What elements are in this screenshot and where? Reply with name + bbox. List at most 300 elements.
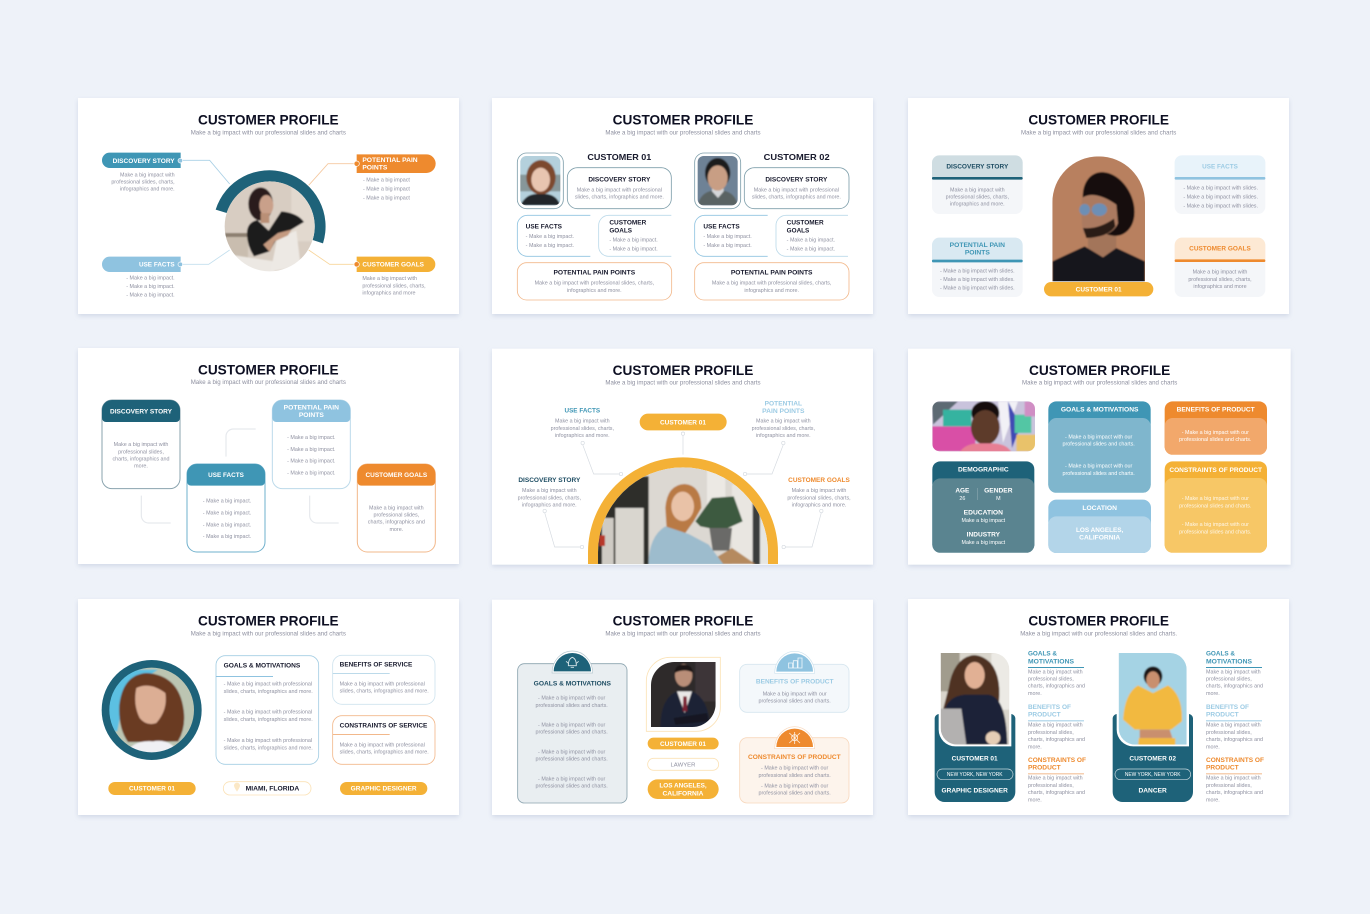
card: use facts: - Make a big impact. [203, 522, 251, 528]
text: customer 02 details: MOTIVATIONS [1206, 658, 1252, 665]
text: customer 01 details: BENEFITS OF [1028, 704, 1071, 711]
text: customer 01 details [1028, 651, 1086, 803]
text: customer 01 details: Make a big impact with [1028, 723, 1083, 729]
panel: slide 8 dome cards [492, 600, 873, 815]
card: use facts: - Make a big impact with slides. [1183, 194, 1258, 200]
pill: customer 01 [648, 738, 719, 749]
text: customer 01 details: professional slides, [1028, 783, 1074, 789]
text: potential pain points [752, 400, 815, 439]
photo: woman in black top [224, 181, 315, 272]
card: constraints of product: - Make a big impact with our [761, 766, 828, 772]
card: use facts: - Make a big impact with slides. [1183, 186, 1258, 192]
card: pain points 01 [517, 263, 672, 300]
text: discovery story: infographics and more. [120, 187, 175, 193]
card: goals and motivations: professional slides and charts. [536, 703, 608, 709]
card: customer 02: DANCER [1138, 787, 1167, 794]
text: customer 02 details: PRODUCT [1206, 765, 1239, 772]
text: customer 02 details: CONSTRAINTS OF [1206, 757, 1264, 764]
card: potential pain points: POINTS [965, 250, 990, 257]
card: potential pain points [272, 400, 350, 489]
card: discovery story 01: slides, charts, infographics and more. [575, 195, 664, 201]
pill: location [223, 782, 311, 795]
text: customer goals: CUSTOMER GOALS [788, 477, 850, 484]
text: customer 01 details: more. [1028, 744, 1042, 750]
text: potential pain points: - Make a big impact [363, 196, 410, 202]
card: demographic: INDUSTRY [967, 531, 1001, 538]
card: potential pain points: - Make a big impact. [287, 471, 336, 477]
card: discovery story 01: Make a big impact with professional [577, 187, 662, 193]
pill: use facts: USE FACTS [139, 262, 175, 269]
text: customer goals: professional slides, charts, [362, 283, 426, 289]
card: benefits of product: professional slides and charts. [1179, 437, 1251, 443]
text: potential pain points: professional slides, charts, [752, 426, 815, 432]
card: discovery story: DISCOVERY STORY [946, 164, 1009, 171]
card: use facts 01: USE FACTS [526, 223, 562, 230]
card: benefits of product: BENEFITS OF PRODUCT [756, 679, 834, 686]
text: customer goals [787, 477, 851, 508]
card: benefits of product [740, 664, 849, 712]
card: constraints of product: professional slides and charts. [1179, 503, 1251, 509]
portrait ring [102, 660, 202, 760]
text: customer 02 details: BENEFITS OF [1206, 704, 1249, 711]
card: benefits of service: Make a big impact with professional [340, 681, 425, 687]
text: discovery story: Make a big impact with [120, 172, 175, 178]
card: constraints of product: CONSTRAINTS OF PRODUCT [1169, 467, 1262, 474]
title: CUSTOMER PROFILE [1028, 612, 1169, 628]
subtitle: Make a big impact with our professional slides and charts. [1020, 630, 1177, 637]
card: constraints of service [333, 716, 435, 764]
card: demographic: Make a big impact [962, 540, 1006, 546]
card: constraints of service: CONSTRAINTS OF SERVICE [340, 722, 427, 729]
subtitle: Make a big impact with our professional slides and charts [191, 630, 346, 637]
text: customer 01 details: PRODUCT [1028, 712, 1061, 719]
card: discovery story 02: DISCOVERY STORY [765, 177, 828, 184]
text: discovery story: professional slides, charts, [111, 180, 175, 186]
icon: blue dome [775, 651, 815, 673]
pill: job title [340, 782, 427, 795]
card: goals and motivations: - Make a big impact with our [538, 696, 605, 702]
card: use facts 01 [517, 215, 590, 256]
card: demographic: AGE [955, 487, 969, 494]
text: customer 01 details: CONSTRAINTS OF [1028, 757, 1086, 764]
card: goals and motivations: professional slides and charts. [1063, 441, 1135, 447]
text: customer 02 details: Make a big impact with [1206, 776, 1261, 782]
pill: customer 01: CUSTOMER 01 [129, 785, 175, 792]
card: discovery story [102, 400, 180, 489]
card: customer goals: CUSTOMER GOALS [365, 472, 427, 479]
card: goals and motivations: professional slides and charts. [536, 757, 608, 763]
card: demographic: GENDER [984, 487, 1013, 494]
photo frame: customer 02 [695, 153, 741, 209]
photo: man in suit [646, 657, 720, 731]
pill: lawyer [648, 758, 719, 770]
card: goals and motivations: - Make a big impact with professional [224, 710, 312, 716]
pill: use facts [102, 257, 183, 272]
card: discovery story: professional slides, [118, 449, 164, 455]
pill: discovery story: DISCOVERY STORY [113, 158, 175, 165]
photo: laughing woman [940, 651, 1010, 746]
card: customer goals 01: CUSTOMER [609, 220, 647, 227]
card: goals and motivations: - Make a big impact with professional [224, 682, 312, 688]
card: goals and motivations: slides, charts, infographics and more. [224, 717, 313, 723]
card: discovery story: Make a big impact with [950, 187, 1005, 193]
card: potential pain points: POTENTIAL PAIN [284, 404, 339, 411]
card: potential pain points: - Make a big impact with slides. [940, 286, 1015, 292]
text: potential pain points: PAIN POINTS [762, 408, 804, 415]
card: customer goals 01: - Make a big impact. [609, 238, 658, 244]
card: customer 02: CUSTOMER 02 [1129, 756, 1176, 763]
connectors [141, 429, 339, 523]
card: location: LOCATION [1082, 505, 1117, 512]
card: goals and motivations: GOALS & MOTIVATIONS [534, 680, 611, 687]
connector lines [183, 160, 355, 264]
subtitle: Make a big impact with our professional slides and charts [191, 129, 346, 136]
card: use facts [187, 464, 265, 552]
card: discovery story 02 [744, 168, 849, 209]
card: customer goals 02: CUSTOMER [787, 220, 824, 227]
pill: location [648, 779, 719, 799]
card: location [1048, 500, 1151, 553]
text: use facts: - Make a big impact. [126, 275, 175, 281]
card: discovery story: professional slides, charts, [946, 195, 1010, 201]
card: discovery story: infographics and more. [950, 202, 1005, 208]
card: customer goals: Make a big impact with [1193, 270, 1247, 276]
photo: woman with long hair [108, 666, 196, 755]
pill: potential pain points: POTENTIAL PAIN [362, 157, 418, 164]
card: benefits of product: BENEFITS OF PRODUCT [1177, 407, 1255, 414]
card: goals and motivations: professional slides and charts. [536, 784, 608, 790]
card: discovery story: more. [134, 463, 148, 469]
subtitle: Make a big impact with our professional slides and charts [605, 630, 761, 637]
text: customer 01 details: MOTIVATIONS [1028, 658, 1074, 665]
text: customer goals: Make a big impact with [362, 276, 417, 282]
photo: woman in yellow hoodie [1118, 651, 1188, 746]
panel: slide 1 radial profile [78, 98, 459, 314]
pill: location: CALIFORNIA [662, 790, 704, 797]
pill: customer goals [354, 257, 435, 272]
pill: potential pain points: POINTS [362, 165, 387, 172]
card: goals and motivations [1048, 401, 1151, 493]
card: potential pain points [932, 238, 1023, 297]
card: demographic: 26 [959, 496, 965, 502]
card: goals and motivations: professional slides and charts. [536, 730, 608, 736]
text: customer 02 details: professional slides, [1206, 730, 1252, 736]
text: customer 02 details: professional slides, [1206, 783, 1252, 789]
card: use facts: - Make a big impact with slides. [1183, 203, 1258, 209]
card: customer goals [1175, 238, 1265, 297]
text: customer goals [362, 276, 426, 296]
card: use facts 02: - Make a big impact. [703, 243, 752, 249]
subtitle: Make a big impact with our professional slides and charts [1021, 129, 1176, 136]
text: customer 02 details: more. [1206, 691, 1220, 697]
pill: potential pain points [354, 154, 436, 173]
text: customer goals: infographics and more [362, 290, 416, 296]
card: pain points 02 [695, 263, 849, 300]
card: use facts: - Make a big impact. [203, 499, 251, 505]
title: CUSTOMER PROFILE [613, 112, 753, 128]
text: customer 02 details: professional slides, [1206, 677, 1252, 683]
card: discovery story: Make a big impact with [114, 442, 168, 448]
card: benefits of product: Make a big impact with our [763, 691, 827, 697]
card: demographic [932, 461, 1034, 553]
text: customer 02 details: GOALS & [1206, 651, 1235, 658]
text: customer 01 details: professional slides, [1028, 730, 1074, 736]
text: use facts [126, 275, 175, 299]
pill: job title: GRAPHIC DESIGNER [351, 785, 417, 792]
pill: discovery story [102, 153, 183, 168]
panel: slide 7 circular portrait with boxes [78, 599, 459, 815]
card: constraints of product: - Make a big impact with our [1182, 496, 1249, 502]
text: customer 02 details [1206, 651, 1264, 803]
card: goals and motivations: - Make a big impact with our [1065, 464, 1132, 470]
pill: customer 01 [640, 414, 727, 430]
card: use facts: USE FACTS [1202, 164, 1238, 171]
card: customer 01 [935, 714, 1015, 802]
text: use facts: - Make a big impact. [126, 293, 175, 299]
subtitle: Make a big impact with our professional slides and charts [191, 379, 346, 386]
card: goals and motivations: professional slides and charts. [1063, 471, 1135, 477]
card: use facts: - Make a big impact. [203, 510, 251, 516]
card: potential pain points: - Make a big impact. [287, 459, 336, 465]
text: potential pain points: Make a big impact with [756, 419, 811, 425]
card: demographic: EDUCATION [964, 509, 1003, 516]
text: customer 02 details: charts, infographics and [1206, 737, 1263, 743]
title: CUSTOMER PROFILE [1028, 112, 1169, 128]
card: benefits of service: slides, charts, infographics and more. [340, 689, 429, 695]
title: CUSTOMER PROFILE [613, 362, 753, 378]
text: customer 01 details: charts, infographics and [1028, 684, 1085, 690]
card: constraints of service: Make a big impact with professional [340, 742, 425, 748]
card: use facts 01: - Make a big impact. [526, 234, 574, 240]
card: customer goals 02: GOALS [787, 227, 809, 234]
photo frame: customer 01 [517, 153, 563, 209]
title: CUSTOMER PROFILE [198, 612, 339, 628]
icon: teal dome [552, 651, 593, 673]
card: potential pain points: - Make a big impact with slides. [940, 268, 1015, 274]
card: goals and motivations: GOALS & MOTIVATIONS [1061, 407, 1138, 414]
card: customer 01: NEW YORK, NEW YORK [947, 772, 1003, 778]
text: customer 01 details: charts, infographics and [1028, 790, 1085, 796]
text: customer 01 details: PRODUCT [1028, 765, 1061, 772]
card: customer goals: infographics and more [1193, 284, 1247, 290]
card: discovery story 02: slides, charts, infographics and more. [752, 195, 841, 201]
card: customer 02 [1113, 714, 1193, 802]
card: pain points 01: Make a big impact with professional slides, charts, [535, 281, 655, 287]
card: use facts 01: - Make a big impact. [526, 243, 574, 249]
text: customer 02 details: charts, infographics and [1206, 790, 1263, 796]
card: discovery story [932, 155, 1023, 214]
card: goals and motivations: GOALS & MOTIVATIONS [224, 663, 300, 670]
card: discovery story 01: DISCOVERY STORY [588, 177, 651, 184]
panel: slide 9 two customers with text columns [908, 599, 1289, 815]
card: potential pain points: - Make a big impact. [287, 447, 336, 453]
text: discovery story: infographics and more. [522, 502, 577, 508]
title: CUSTOMER PROFILE [1029, 362, 1170, 378]
text: potential pain points: - Make a big impact [363, 177, 410, 183]
card: constraints of product: professional slides and charts. [759, 791, 831, 797]
photo: man in hat [1050, 155, 1148, 283]
heading: customer 02: CUSTOMER 02 [764, 152, 830, 162]
card: location: CALIFORNIA [1079, 535, 1121, 542]
text: customer 02 details: charts, infographics and [1206, 684, 1263, 690]
card: use facts [1175, 155, 1265, 214]
pill: location: MIAMI, FLORIDA [246, 785, 300, 792]
card: potential pain points: - Make a big impact. [287, 435, 336, 441]
text: potential pain points: POTENTIAL [765, 400, 802, 407]
text: customer 01 details: charts, infographics and [1028, 737, 1085, 743]
panel: slide 4 staggered cards [78, 348, 459, 564]
connectors [543, 432, 823, 549]
card: benefits of product [1165, 401, 1267, 455]
card: use facts 02 [695, 215, 768, 256]
pill: customer goals: CUSTOMER GOALS [362, 262, 424, 269]
panel: slide 6 colour grid [908, 349, 1291, 565]
card: benefits of product: - Make a big impact with our [1182, 430, 1249, 436]
card: potential pain points: - Make a big impact with slides. [940, 277, 1015, 283]
text: customer goals: professional slides, charts, [787, 495, 851, 501]
text: use facts: professional slides, charts, [551, 426, 615, 432]
text: customer goals: infographics and more. [792, 502, 846, 508]
photo: smiling woman with plant [597, 466, 770, 565]
card: benefits of product: professional slides and charts. [759, 699, 831, 705]
card: constraints of product [740, 738, 849, 803]
card: constraints of service: slides, charts, infographics and more. [340, 750, 429, 756]
card: constraints of product: professional slides and charts. [759, 773, 831, 779]
title: CUSTOMER PROFILE [198, 112, 339, 128]
pill: customer 01: CUSTOMER 01 [1076, 286, 1122, 293]
panel: slide 2 two customers [492, 98, 873, 314]
card: use facts: USE FACTS [208, 472, 244, 479]
card: demographic: M [996, 496, 1001, 502]
card: customer goals 02: - Make a big impact. [787, 238, 835, 244]
title: CUSTOMER PROFILE [198, 362, 339, 378]
card: discovery story 01 [567, 168, 671, 209]
text: potential pain points [363, 177, 410, 202]
pill: lawyer: LAWYER [670, 762, 695, 768]
text: customer 02 details: more. [1206, 744, 1220, 750]
panel: slide 3 arch portrait [908, 98, 1289, 314]
text: customer 01 details: professional slides, [1028, 677, 1074, 683]
card: pain points 02: POTENTIAL PAIN POINTS [731, 270, 812, 277]
text: customer 02 details: Make a big impact with [1206, 723, 1261, 729]
card: potential pain points: POINTS [299, 412, 324, 419]
card: customer goals [357, 464, 435, 552]
panel: slide 5 half circle portrait [492, 349, 873, 565]
card: constraints of product: CONSTRAINTS OF PRODUCT [748, 754, 841, 761]
card: pain points 01: POTENTIAL PAIN POINTS [553, 270, 635, 277]
card: goals and motivations: - Make a big impact with professional [224, 738, 312, 744]
card: pain points 01: infographics and more. [567, 288, 622, 294]
card: customer goals: professional slides, [373, 513, 420, 519]
card: customer 02: NEW YORK, NEW YORK [1125, 772, 1181, 778]
card: benefits of service: BENEFITS OF SERVICE [340, 661, 412, 668]
text: use facts: - Make a big impact. [126, 284, 175, 290]
card: goals and motivations: - Make a big impact with our [1065, 434, 1132, 440]
pill: customer 01: CUSTOMER 01 [660, 741, 706, 748]
title: CUSTOMER PROFILE [613, 612, 753, 628]
photo: man against graffiti [931, 400, 1036, 453]
text: use facts: USE FACTS [564, 408, 600, 415]
card: constraints of product: - Make a big impact with our [1182, 522, 1249, 528]
text: customer 02 details: more. [1206, 797, 1220, 803]
card: discovery story: charts, infographics and [112, 456, 170, 462]
card: goals and motivations [216, 656, 319, 764]
progress arc [216, 170, 326, 243]
subtitle: Make a big impact with our professional slides and charts [1022, 380, 1177, 387]
card: customer goals 02: - Make a big impact. [787, 247, 835, 253]
card: demographic: DEMOGRAPHIC [958, 466, 1009, 473]
card: pain points 02: Make a big impact with professional slides, charts, [712, 281, 832, 287]
card: customer goals 01: - Make a big impact. [609, 247, 658, 253]
card: customer goals: more. [389, 527, 403, 533]
text: discovery story [111, 172, 175, 193]
pill: customer 01 [108, 782, 196, 795]
text: use facts: Make a big impact with [555, 419, 610, 425]
card: customer goals: Make a big impact with [369, 505, 424, 511]
card: pain points 02: infographics and more. [744, 288, 799, 294]
card: location: LOS ANGELES, [1076, 527, 1124, 534]
text: customer 01 details: more. [1028, 691, 1042, 697]
card: goals and motivations: slides, charts, infographics and more. [224, 689, 313, 695]
card: constraints of product: - Make a big impact with our [761, 783, 828, 789]
card: customer 01: GRAPHIC DESIGNER [941, 787, 1008, 794]
text: potential pain points: infographics and more. [756, 433, 811, 439]
text: customer 01 details: more. [1028, 797, 1042, 803]
text: discovery story: DISCOVERY STORY [518, 477, 581, 484]
text: customer 02 details: Make a big impact with [1206, 669, 1261, 675]
card: demographic: Make a big impact [962, 518, 1006, 524]
subtitle: Make a big impact with our professional slides and charts [605, 380, 761, 387]
card: discovery story: DISCOVERY STORY [110, 408, 173, 415]
card: customer 01: CUSTOMER 01 [952, 756, 998, 763]
text: customer 01 details: Make a big impact with [1028, 776, 1083, 782]
subtitle: Make a big impact with our professional slides and charts [605, 129, 761, 136]
card: goals and motivations: - Make a big impact with our [538, 749, 605, 755]
text: use facts [551, 408, 615, 439]
card: constraints of product: professional slides and charts. [1179, 529, 1251, 535]
text: customer 01 details: GOALS & [1028, 651, 1057, 658]
card: benefits of service [333, 655, 435, 704]
pill: customer 01 [1044, 282, 1153, 296]
card: goals and motivations: - Make a big impact with our [538, 776, 605, 782]
card: customer goals: charts, infographics and [368, 520, 425, 526]
card: goals and motivations: slides, charts, infographics and more. [224, 745, 313, 751]
text: discovery story: professional slides, charts, [518, 495, 582, 501]
heading: customer 01: CUSTOMER 01 [587, 152, 652, 162]
card: customer goals 01 [599, 215, 671, 256]
pill: customer 01: CUSTOMER 01 [660, 419, 706, 426]
card: constraints of product [1165, 461, 1267, 553]
card: use facts 02: - Make a big impact. [703, 234, 752, 240]
text: discovery story: Make a big impact with [522, 488, 577, 494]
card: potential pain points: POTENTIAL PAIN [950, 242, 1005, 249]
text: customer 02 details: PRODUCT [1206, 712, 1239, 719]
text: potential pain points: - Make a big impact [363, 186, 410, 192]
card: customer goals: CUSTOMER GOALS [1189, 246, 1251, 253]
card: goals and motivations [518, 664, 627, 803]
half ring [588, 457, 778, 564]
text: discovery story [518, 477, 582, 508]
text: customer goals: Make a big impact with [792, 488, 846, 494]
card: customer goals 02 [776, 215, 848, 256]
text: use facts: infographics and more. [555, 433, 610, 439]
card: goals and motivations: - Make a big impact with our [538, 723, 605, 729]
card: use facts 02: USE FACTS [703, 223, 740, 230]
pill: location: LOS ANGELES, [659, 783, 707, 790]
icon: orange dome [775, 727, 815, 749]
text: customer 01 details: Make a big impact with [1028, 669, 1083, 675]
card: customer goals: professional slides, charts, [1188, 277, 1252, 283]
